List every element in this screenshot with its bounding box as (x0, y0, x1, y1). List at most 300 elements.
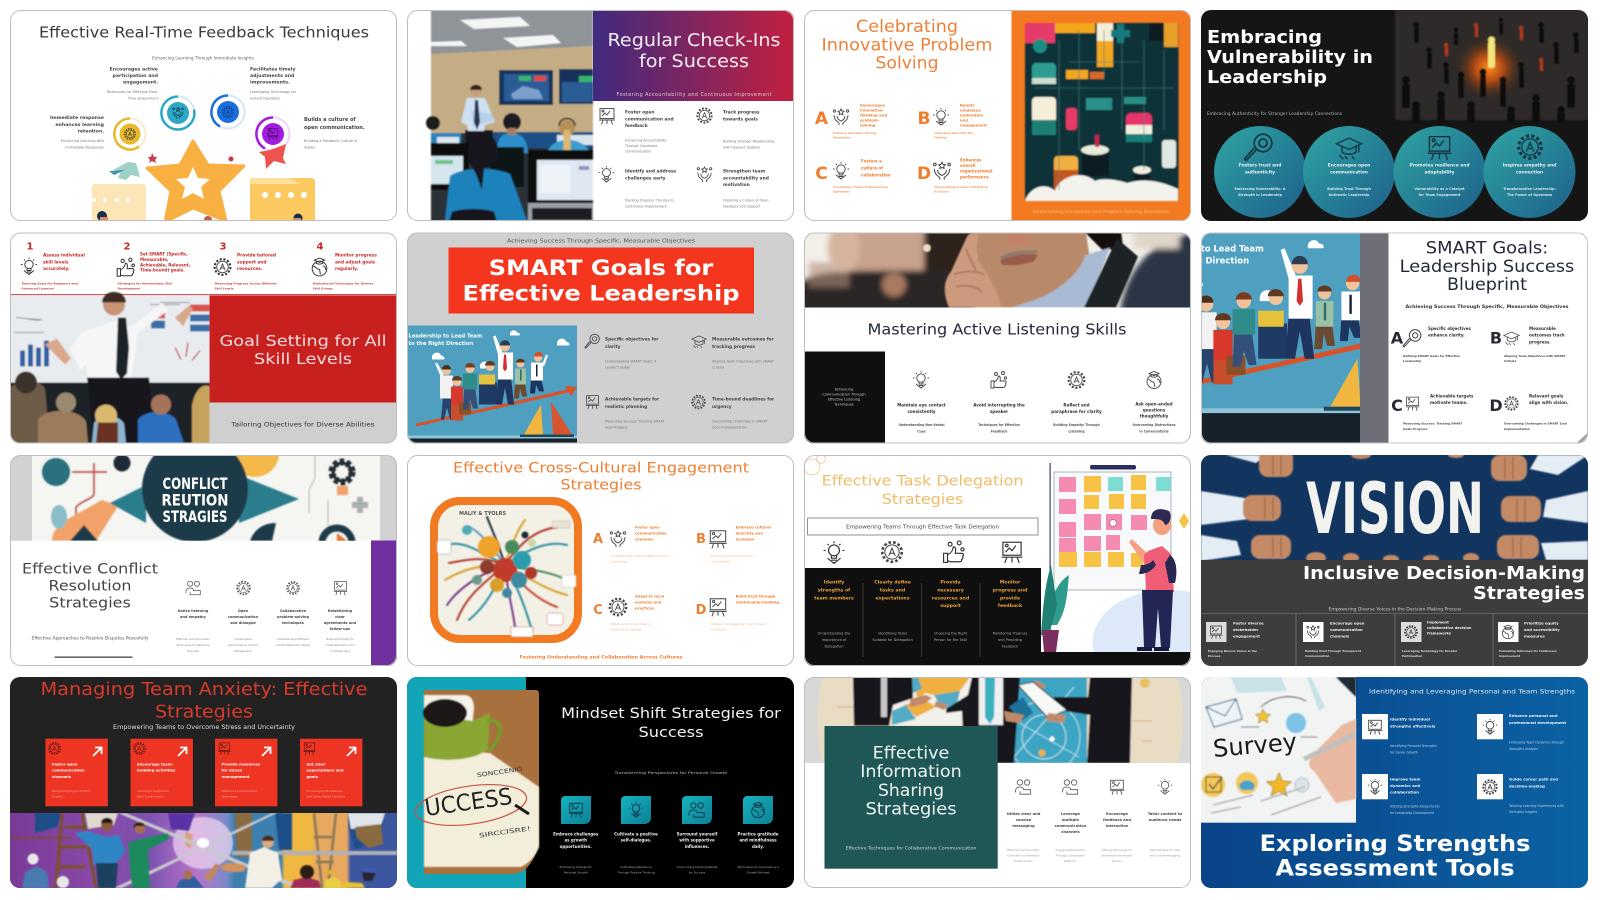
item B: Embrace cultural (736, 526, 771, 530)
card: open communication: Anxiety (52, 794, 63, 798)
card: clear expectations: Encouraging Mindfulness (306, 789, 343, 793)
slide: SMART Goals Leadership Success Blueprint (1079, 212, 1588, 509)
card: open communication: Recognizing Signs of Team (52, 789, 91, 793)
item B: B (1490, 328, 1502, 348)
item: encourages participation: Techniques for Effective Real- (105, 90, 159, 94)
subtitle: Enhancing Learning Through Immediate Insights (152, 56, 254, 60)
card: clear expectations: Set clear (306, 762, 326, 766)
item A: A (815, 109, 829, 129)
item C (1391, 394, 1474, 431)
column: collaborative problem solving: Understanding Different (277, 637, 309, 641)
item A: Defining SMART Goals for Effective (1403, 354, 1460, 358)
column: monitor progress: progress and (993, 587, 1027, 593)
item: track progress: Track progress (723, 110, 760, 116)
column: identify strengths: Identify (824, 580, 844, 586)
item: measurable outcomes (692, 336, 775, 370)
circle: promotes resilience: for Team Engagement (1419, 193, 1461, 197)
column: monitor progress (993, 580, 1028, 648)
item: facilitates adjustments: Facilitates timely (250, 66, 296, 72)
column: embrace challenges (553, 796, 599, 874)
column: equity and accessibility: Prioritize equity (1524, 620, 1559, 626)
item A (1391, 326, 1472, 363)
item C: Fosters a (861, 158, 882, 164)
subtitle: Embracing Authenticity for Stronger Leadership Connections (1207, 111, 1342, 116)
item: encourages participation: Time assessment (127, 96, 159, 100)
item A: Foster open (635, 526, 660, 530)
item D: overall (960, 163, 976, 168)
item B: B (696, 532, 706, 547)
step 2: Development (118, 286, 141, 290)
column: open communication: Collaborative (234, 637, 252, 641)
item B: outcomes track (1529, 333, 1565, 338)
item: specific objectives: Leader's Guide (605, 366, 630, 370)
photo: coffee and SUCCESS notebook: SIRCCISRE! (479, 825, 531, 840)
item: identify strengths: strengths effectively (1390, 724, 1436, 728)
title: Celebrating (856, 17, 958, 36)
item: personal development: professional development (1509, 720, 1566, 725)
item: facilitates adjustments: Instant Feedback (250, 96, 281, 100)
column: gratitude: Growth Mindset (747, 870, 770, 874)
item B: and (960, 118, 968, 122)
card: clear expectations: and Stress-Relief Activities (306, 794, 345, 798)
card: open communication: communication (52, 768, 85, 773)
item: strengthen accountability: Strengthen team (723, 168, 766, 174)
item C: Measuring Success: Tracking SMART (1403, 422, 1462, 426)
column: eye contact: Cues (917, 430, 926, 434)
column: positive self-dialogue: Through Positive Thinking (616, 870, 655, 874)
item C: Achievable targets (1430, 394, 1474, 398)
photo: coach at whiteboard (10, 292, 210, 444)
step 3: 3 (220, 242, 227, 252)
item: builds culture: open communication. (304, 125, 365, 131)
item: achievable targets: realistic planning (605, 404, 647, 410)
title: Solving (876, 54, 938, 73)
item D: performance (960, 174, 989, 179)
column: active listening: Techniques for Resolving (175, 643, 210, 647)
top subtitle: Identifying and Leveraging Personal and Team Strengths (1369, 688, 1576, 696)
title: Goal Setting for All (220, 332, 386, 350)
item B: Measurable (1529, 326, 1556, 331)
item: foster open communication: Foster open (625, 110, 654, 116)
column: open communication (228, 582, 259, 653)
column: identify strengths: Understanding the (818, 632, 850, 636)
illustration: star and chat bubbles (92, 141, 315, 226)
column: stakeholder engagement: Foster diverse (1233, 620, 1264, 626)
title: Strategies (155, 702, 253, 722)
column: equity and accessibility: measures (1524, 634, 1546, 639)
column: gratitude (737, 796, 779, 874)
black side box: Communication Through (822, 392, 866, 396)
column: monitor progress: Monitoring Progress (993, 632, 1028, 636)
column: open channels: Communication (1305, 654, 1330, 658)
column: multiple channels: communication (1055, 824, 1087, 828)
item D: align with vision. (1529, 400, 1569, 405)
caption: Fostering Understanding and Collaboration Across Cultures (520, 654, 683, 660)
column: open communication: communication (228, 615, 259, 619)
circle: inspires empathy: The Power of Openness (1507, 193, 1552, 197)
step 1: Assess individual (43, 252, 85, 258)
column: define tasks: Suitable for Delegation (872, 638, 913, 642)
column: clear agreements: Building Empathy to (326, 637, 354, 641)
column: stakeholder engagement: stakeholder (1233, 627, 1259, 632)
card: stress resources: Provide resources (222, 762, 261, 766)
subtitle box: Empowering Teams Through Effective Task Delegation (846, 524, 999, 530)
column: embrace challenges: as growth (564, 838, 587, 843)
item: immediate response: Enhancing Learning with (61, 139, 104, 143)
step 3 (214, 242, 277, 290)
column: provide resources: Choosing the Right (934, 632, 968, 636)
column: clear messaging: Dissemination (1014, 859, 1033, 863)
subtitle box (808, 518, 1038, 535)
title: Mastering Active Listening Skills (868, 320, 1127, 338)
icon rings (114, 95, 290, 150)
column: identify strengths: Importance of (822, 638, 847, 642)
column: open-ended questions: Overcoming Distractions (1132, 423, 1176, 427)
slide: Managing Team Anxiety (10, 677, 397, 888)
column: equity and accessibility: and accessibility (1524, 627, 1560, 632)
item: specific objectives (585, 334, 659, 370)
illustration: person at kanban board (1041, 455, 1191, 652)
illustration: team on a balance beam (367, 312, 627, 498)
photo: coffee and SUCCESS notebook: UCCESS (423, 784, 514, 822)
card: stress resources: Techniques (220, 794, 238, 798)
step 4: Motivational Techniques for Diverse (313, 282, 373, 286)
item B: employee (960, 108, 981, 112)
item: strengthen accountability: motivation (723, 182, 750, 188)
card: team-building (130, 739, 193, 806)
photo: survey sheet (1201, 677, 1356, 823)
item: team dynamics: collaboration (1390, 789, 1419, 794)
column: active listening: Active listening (178, 609, 209, 613)
column: stakeholder engagement (1206, 620, 1264, 658)
item C: practices (635, 606, 655, 610)
column: open-ended questions: questions (1143, 408, 1166, 412)
subtitle: Fostering Accountability and Continuous Improvement (616, 92, 772, 98)
column: monitor progress: Monitor (1000, 580, 1021, 586)
column: gratitude: and mindfulness (739, 838, 777, 843)
item: achievable targets: Measuring Success: Tracking SMART (605, 420, 666, 424)
column: eye contact: Maintain eye contact (897, 402, 946, 408)
slide: Effective Conflict Resolution Strategies (10, 429, 397, 666)
card: open communication (45, 739, 108, 806)
column: open channels: Building Trust Through Transparent (1305, 649, 1362, 653)
column: tailor content: Tailor content to (1148, 812, 1183, 816)
item: team dynamics (1362, 774, 1440, 815)
item: achievable targets (586, 396, 666, 430)
title: Blueprint (1447, 275, 1528, 294)
circle: fosters trust (1214, 126, 1306, 218)
column: collaborative frameworks: Leveraging Technology for Broader (1402, 649, 1458, 653)
column: open communication: and dialogue (230, 621, 256, 625)
item A: communication (635, 532, 667, 536)
column: reflect: Reflect and (1063, 402, 1090, 408)
column: supportive influences: influences. (685, 844, 710, 849)
column: eye contact: Understanding Non-Verbal (898, 423, 945, 427)
slide: Mastering Active Listening Skills (798, 222, 1195, 444)
item B: motivation (960, 112, 983, 118)
step 4: Skill Groups (313, 286, 333, 290)
item: immediate response (50, 115, 104, 149)
slide: Mindset Shift Strategies for Success (407, 677, 794, 888)
item B (1490, 326, 1566, 363)
photo: coffee and SUCCESS notebook (413, 690, 539, 874)
column: supportive influences: Surround yourself (677, 832, 718, 836)
item A: Similarities (611, 559, 628, 563)
banner illustration: REUTION (162, 490, 228, 510)
card: stress resources: Effective Communication (222, 789, 258, 793)
item B: Building Trust Across Diverse (711, 554, 753, 558)
column: monitor progress: feedback (998, 603, 1023, 609)
item: track progress: with Frequent Updates (723, 145, 761, 149)
column: gratitude: Practice gratitude (738, 832, 779, 836)
item: time-bound deadlines (692, 396, 775, 430)
circle: fosters trust: Fosters trust and (1239, 162, 1281, 168)
item B: Communities (711, 559, 731, 563)
item: immediate response: Immediate Responses (65, 145, 104, 149)
item: time-bound deadlines: Overcoming Challenges in SMART (712, 420, 769, 424)
column: positive self-dialogue: Cultivate a positive (614, 832, 658, 836)
item: track progress: Building Stronger Relationships (723, 140, 775, 144)
title: Strategies (560, 478, 642, 494)
circle: fosters trust: Embracing Vulnerability: A (1234, 187, 1286, 191)
item A: channels (635, 538, 654, 542)
step 1: Tailoring Goals for Beginners and (21, 282, 78, 286)
item: team dynamics: Improve team (1390, 776, 1421, 782)
title: Mindset Shift Strategies for (561, 706, 781, 722)
item D: to Success (934, 190, 950, 194)
column: avoid interrupting (973, 372, 1025, 434)
card: stress resources: management (222, 774, 250, 779)
circle: promotes resilience: Promotes resilience and (1410, 162, 1469, 168)
item A: Fostering Innovation Through (833, 131, 877, 135)
step 4: regularly. (335, 266, 359, 272)
circle: promotes resilience: Vulnerability as a Catalyst (1414, 187, 1465, 191)
title: SMART Goals for (489, 256, 714, 281)
item B: diversity and (736, 532, 763, 536)
subtitle: Empowering Diverse Voices in the Decision-Making Process (1328, 606, 1462, 612)
card: team-building: building activities (137, 768, 176, 773)
title: SMART Goals: (1426, 238, 1548, 258)
item B: Thinking (934, 136, 947, 140)
item B: Criteria (1504, 359, 1516, 363)
column: clear messaging: concise (1016, 818, 1032, 822)
title: Effective Leadership (462, 282, 740, 306)
item C: customs and (635, 600, 662, 604)
subtitle: Achieving Success Through Specific, Measurable Objectives (1406, 304, 1569, 310)
circle: fosters trust: Strength in Leadership (1238, 193, 1283, 197)
item: specific objectives: clarity (605, 344, 621, 350)
item A (815, 102, 887, 140)
title: Leadership (1207, 68, 1327, 88)
column: embrace challenges: Personal Growth (564, 870, 588, 874)
column: feedback (1101, 780, 1133, 863)
circle: encourages open communication: Encourages open (1328, 162, 1370, 168)
item A: problem- (860, 118, 880, 122)
slide: Effective Cross-Cultural Engagement Strategies (407, 455, 794, 666)
item: personal development: Enhance personal and (1509, 713, 1558, 718)
title: Assessment Tools (1276, 856, 1514, 882)
item B: Celebrating Out-of-the-Box (934, 131, 974, 135)
item: builds culture (303, 117, 365, 149)
caption: Tailoring Objectives for Diverse Abilities (230, 420, 375, 428)
header band (593, 10, 794, 101)
item: identify challenges: Identify and address (625, 168, 677, 174)
item C (815, 158, 891, 194)
item: encourages participation (105, 66, 159, 100)
column: collaborative problem solving (276, 582, 311, 647)
item D: D (917, 164, 931, 184)
item: foster open communication: feedback (625, 123, 648, 129)
column: identify strengths (814, 580, 854, 648)
slide: Embracing Vulnerability in Leadership (1201, 10, 1588, 221)
item: measurable outcomes: Aligning Team Objectives with SMART (712, 360, 775, 364)
item D: Overcoming Challenges in SMART Goal (1504, 422, 1567, 426)
column: monitor progress: provide (1000, 595, 1020, 601)
column: collaborative frameworks: Participation (1402, 654, 1422, 658)
photo: coffee and SUCCESS notebook: SONCCENIG (477, 766, 523, 779)
circle: fosters trust: authenticity (1245, 170, 1275, 176)
step 2: Set SMART (Specific, (140, 252, 188, 256)
column: provide resources (932, 580, 969, 642)
grey band (1360, 232, 1388, 444)
item: strengthen accountability (697, 167, 769, 208)
card: team-building: Creating a Supportive (137, 789, 169, 793)
column: supportive influences: with supportive (679, 838, 715, 843)
item B: Aligning Team Objectives with SMART (1504, 354, 1566, 358)
item: strengthen accountability: Feedback and Support (723, 204, 761, 208)
item C (593, 594, 664, 632)
column: equity and accessibility: Evaluating Outcomes for Continuous (1499, 649, 1557, 653)
item B (696, 526, 771, 563)
item D (1489, 394, 1569, 431)
column: collaborative frameworks: Implement (1427, 620, 1449, 624)
title: Effective (873, 744, 949, 764)
column: open-ended questions: thoughtfully (1140, 414, 1169, 418)
circle: encourages open communication: Building Trust Through (1327, 187, 1371, 191)
slide: Effective Task Delegation Strategies (804, 454, 1191, 666)
title: Information (860, 762, 962, 782)
column: feedback: interaction (1106, 824, 1129, 828)
slide: Inclusive Decision-Making Strategies (1201, 449, 1588, 666)
column: tailor content (1148, 779, 1183, 858)
title: Strategies (1473, 584, 1585, 604)
column: clear agreements: Establishing (328, 609, 353, 613)
item C: Approaches (833, 190, 850, 194)
column: collaborative problem solving: problem-solving (277, 615, 309, 619)
photo: hands around VISION table: VISION (1306, 468, 1484, 550)
purple side bar (371, 540, 397, 666)
title: Strategies (882, 492, 963, 508)
step 2: Achievable, Relevant, (140, 262, 191, 267)
step 4: and adjust goals (335, 259, 376, 265)
slide: Goal Setting for All Skill Levels (10, 232, 397, 444)
column: collaborative problem solving: Collaborative (280, 609, 307, 613)
column: clear agreements: follow-ups (330, 627, 350, 631)
item: personal development: Enhancing Team Dynamics through (1509, 740, 1564, 744)
item C: C (593, 603, 603, 618)
item B: Boosts (960, 102, 975, 108)
item D: Implementation (1504, 427, 1530, 431)
item C: Effective Communication in (611, 622, 651, 626)
red title panel (210, 296, 397, 402)
teal title box (824, 726, 998, 869)
card: clear expectations: goals (306, 774, 319, 779)
step 3: Provide tailored (237, 252, 276, 258)
step 3: resources. (237, 266, 263, 272)
item D: D (696, 603, 707, 618)
slide: Regular Check-Ins for Success (407, 10, 794, 221)
item A: Encourages (860, 102, 886, 108)
item: track progress (697, 108, 775, 149)
item: specific objectives: Specific objectives for (605, 336, 659, 342)
circle: encourages open communication: communication (1330, 170, 1368, 176)
item: foster open communication: Communication (625, 150, 651, 154)
item: builds culture: Builds a culture of (304, 117, 356, 123)
column: stakeholder engagement: Engaging Diverse Voices in the (1208, 649, 1257, 653)
photo: control room (426, 10, 593, 221)
column: clear messaging (1007, 780, 1041, 863)
column: multiple channels: Engaging Stakeholders (1055, 848, 1086, 852)
card: team-building: Encourage team- (137, 762, 174, 766)
item: builds culture: Building a Feedback Culture in (304, 139, 357, 143)
column: avoid interrupting: speaker (990, 409, 1008, 414)
item A: Recognition (833, 136, 851, 140)
title: Effective Cross-Cultural Engagement (453, 460, 749, 476)
card: stress resources (215, 739, 277, 806)
item: strengthen accountability: Fostering a Culture of Open (723, 198, 768, 202)
item: foster open communication (599, 108, 674, 154)
column: gratitude: daily. (752, 844, 765, 849)
item D: Build trust through (736, 594, 776, 598)
title: Resolution (48, 578, 132, 594)
column: clear agreements: Understanding (330, 649, 350, 653)
title: Embracing (1207, 28, 1322, 48)
column: open communication: Management (234, 649, 252, 653)
step 1: 1 (27, 242, 34, 252)
column: positive self-dialogue: self-dialogue. (621, 838, 652, 843)
item: identify challenges (599, 166, 677, 208)
step 2: Time-bound) goals. (140, 268, 185, 273)
column: clear agreements: clear (335, 615, 345, 619)
title: Sharing (878, 781, 944, 801)
column: positive self-dialogue (614, 796, 658, 874)
step 1: accurately. (43, 266, 70, 272)
circle: promotes resilience (1394, 126, 1486, 218)
column: clear messaging: Effective Communication (1007, 848, 1040, 852)
item: encourages participation: engagement. (123, 80, 158, 86)
step 3: support and (237, 259, 266, 265)
step 2 (117, 242, 191, 290)
step 4: Monitor progress (335, 252, 377, 258)
column: positive self-dialogue: Cultivating Resilience (620, 865, 652, 869)
column: reflect (1051, 372, 1102, 434)
item B: B (918, 109, 930, 129)
step 2: Strategies for Intermediate Skill (118, 282, 172, 286)
column: gratitude: Techniques for Developing a (737, 865, 779, 869)
column: tailor content: audience needs (1149, 818, 1182, 822)
black side box: Effective Listening (828, 398, 860, 402)
illustration: enlarged team on beam (1079, 212, 1495, 509)
circle: encourages open communication (1303, 126, 1395, 218)
item: measurable outcomes: Criteria (712, 366, 724, 370)
red title banner (448, 248, 754, 314)
item: immediate response: Immediate response (50, 115, 104, 121)
circle: inspires empathy: connection (1516, 170, 1543, 176)
title: Inclusive Decision-Making (1303, 564, 1585, 584)
circle: inspires empathy: Inspires empathy and (1503, 162, 1556, 168)
black side box: Techniques (833, 402, 854, 406)
column: define tasks: Clearly define (874, 580, 911, 586)
